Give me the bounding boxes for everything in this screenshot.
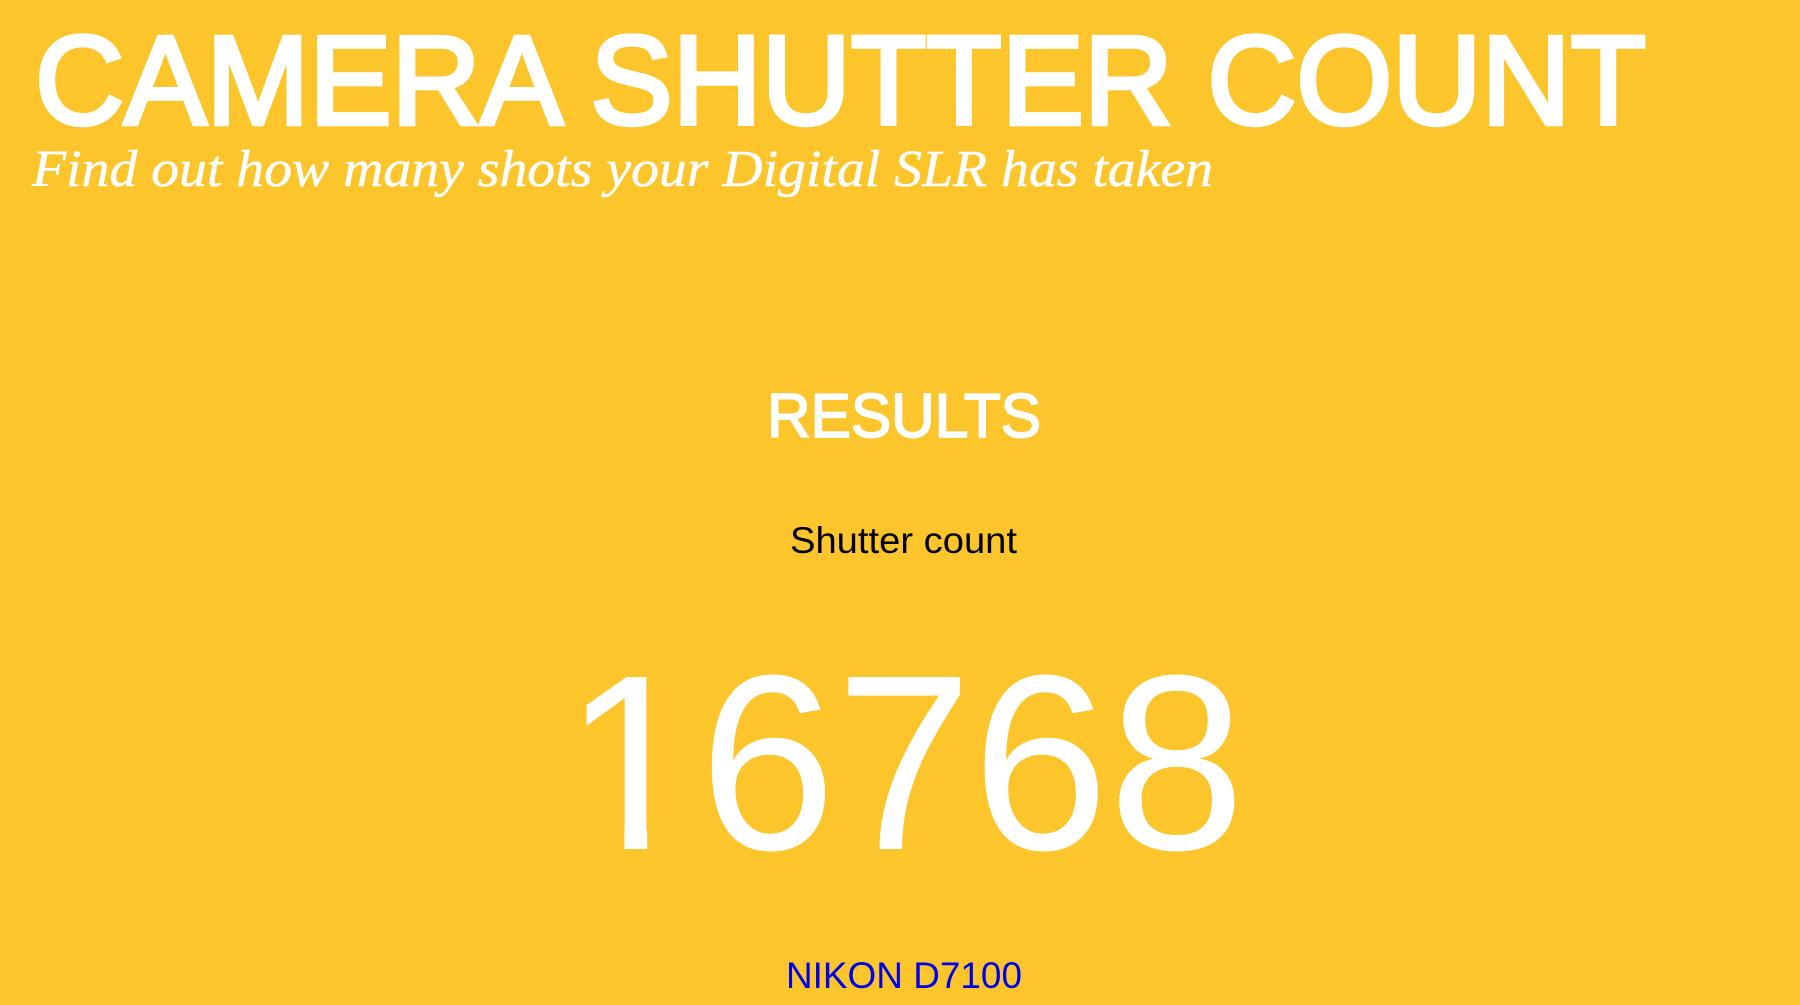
title: CAMERA SHUTTER COUNT [35, 10, 1646, 151]
label: shutter count: Shutter count [790, 520, 1018, 561]
camera model link: NIKON D7100 [786, 955, 1022, 996]
heading: results: RESULTS [767, 382, 1041, 451]
subtitle: Find out how many shots your Digital SLR has taken [31, 141, 1213, 198]
big number: shutter count value: 16768 [563, 623, 1245, 902]
